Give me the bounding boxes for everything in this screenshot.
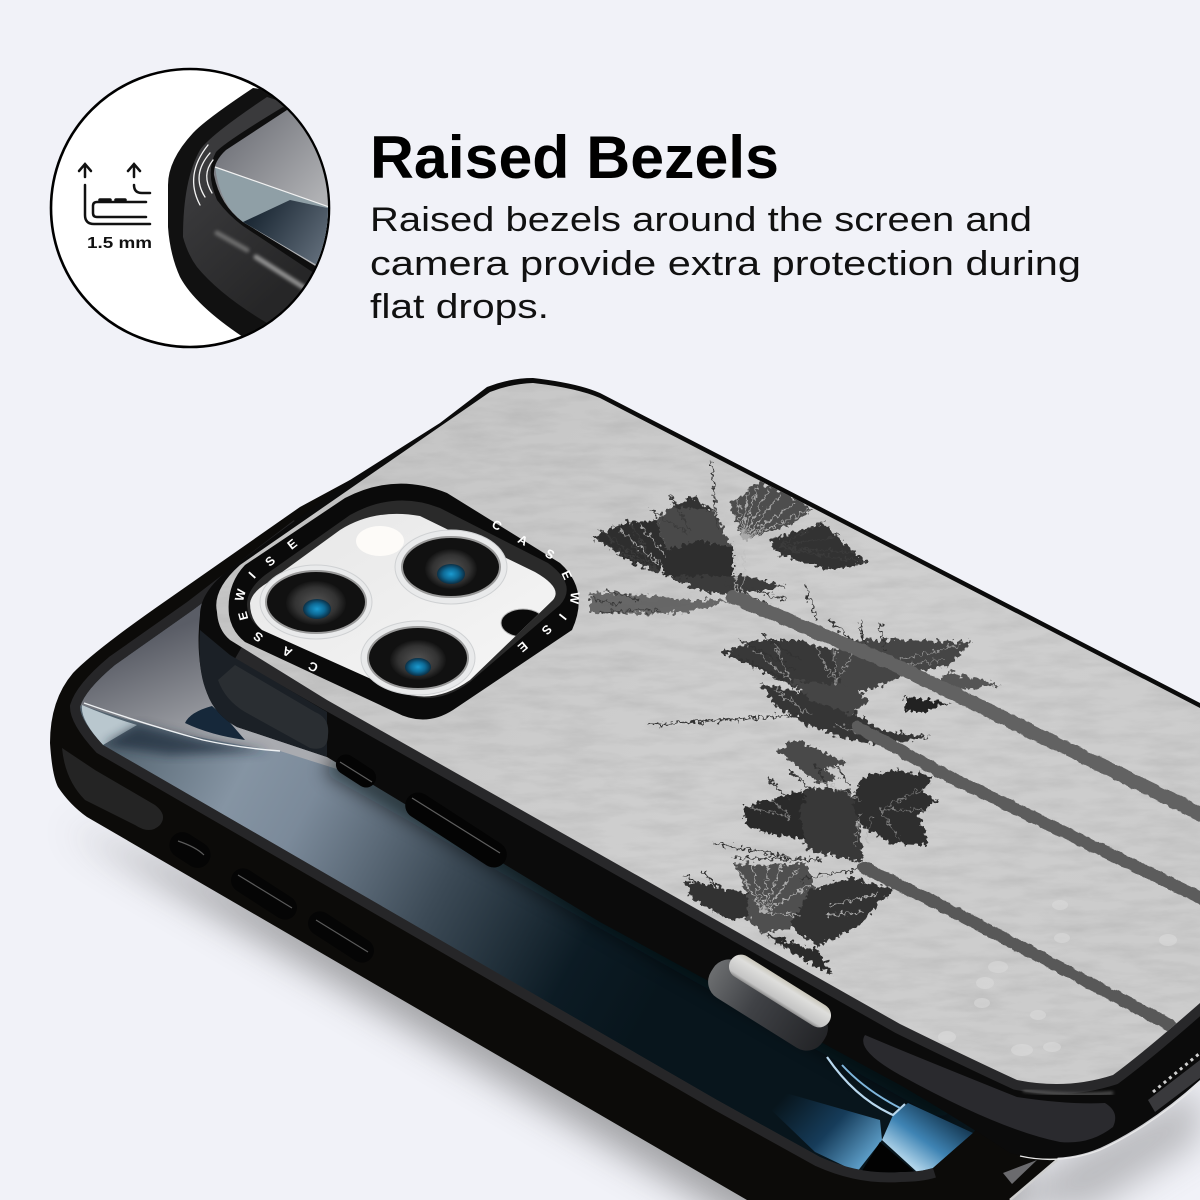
heading: Raised Bezels	[370, 124, 779, 191]
upper phone side button	[400, 788, 512, 872]
case back plate	[216, 383, 1200, 1084]
silver side button	[701, 950, 836, 1058]
icon: bezel height diagram	[79, 164, 150, 224]
lower phone screen	[80, 604, 975, 1172]
description text: camera provide extra protection during	[370, 245, 1081, 283]
camera ring lettering: S	[543, 546, 557, 563]
upper phone cast shadow	[317, 755, 660, 962]
highlights on inset bezel	[217, 233, 303, 287]
camera ring lettering: C	[489, 517, 504, 534]
lens left	[260, 565, 372, 639]
camera ring lettering: C	[306, 658, 320, 675]
lower phone bumper	[50, 480, 1100, 1200]
lower phone volume buttons	[226, 864, 379, 967]
lens bottom	[361, 621, 475, 695]
description text: Raised bezels around the screen and	[370, 201, 1032, 239]
camera ring lettering: E	[515, 639, 530, 655]
camera ring lettering: A	[280, 643, 294, 660]
palm crown 4	[683, 863, 893, 975]
lower phone mute switch	[164, 827, 216, 873]
bezel highlight lower right	[863, 1035, 1115, 1142]
lower phone silver edge	[1010, 1160, 1057, 1200]
icon: impact arcs	[194, 145, 213, 205]
camera ring lettering: S	[539, 622, 555, 638]
gloss line on frame	[1023, 1090, 1113, 1094]
upper frame translucent corner	[199, 630, 327, 757]
camera ring lettering: S	[263, 553, 278, 569]
palm crown 1	[590, 462, 867, 614]
upper phone side port	[332, 751, 380, 791]
screen reflections	[777, 1056, 973, 1172]
upper phone frame	[199, 378, 1200, 1158]
measurement label: 1.5 mm	[87, 235, 152, 252]
upper phone	[198, 378, 1200, 1160]
camera ring lettering: A	[515, 532, 530, 549]
camera ring lettering: E	[285, 536, 300, 552]
camera ring lettering: W	[567, 591, 582, 605]
palm tree trunks	[733, 597, 1200, 1025]
upper phone light outer edge	[1020, 1083, 1200, 1159]
charging port grille	[1148, 1053, 1200, 1112]
camera ring lettering: I	[556, 611, 569, 622]
camera glass window	[250, 514, 556, 696]
camera ring lettering: E	[558, 568, 575, 582]
upper frame lighter rim	[240, 650, 1200, 1084]
lens top right	[395, 530, 507, 604]
lower phone carbon patch	[62, 748, 163, 830]
camera ring lettering	[232, 517, 582, 675]
palm crown 3	[713, 740, 937, 863]
camera ring lettering: S	[251, 628, 266, 645]
upper phone carbon patch near camera	[218, 665, 328, 749]
ground shadows	[66, 826, 1200, 1200]
description text: flat drops.	[370, 288, 549, 326]
camera ring lettering: E	[236, 610, 251, 622]
camera ring lettering: I	[246, 569, 259, 581]
flash	[356, 526, 404, 556]
camera island	[229, 484, 582, 720]
camera ring lettering: W	[232, 587, 249, 603]
description text	[370, 201, 1081, 326]
inset: raised bezel close-up	[51, 69, 340, 347]
palm crown 2	[647, 585, 1000, 745]
lower phone side port	[1003, 1160, 1037, 1184]
camera inner wall	[247, 500, 567, 698]
bokeh dots	[938, 900, 1177, 1056]
lower phone	[50, 480, 1100, 1200]
inset phone corner	[168, 88, 340, 337]
bumper inner rim	[80, 528, 933, 1172]
lidar sensor	[500, 608, 540, 636]
